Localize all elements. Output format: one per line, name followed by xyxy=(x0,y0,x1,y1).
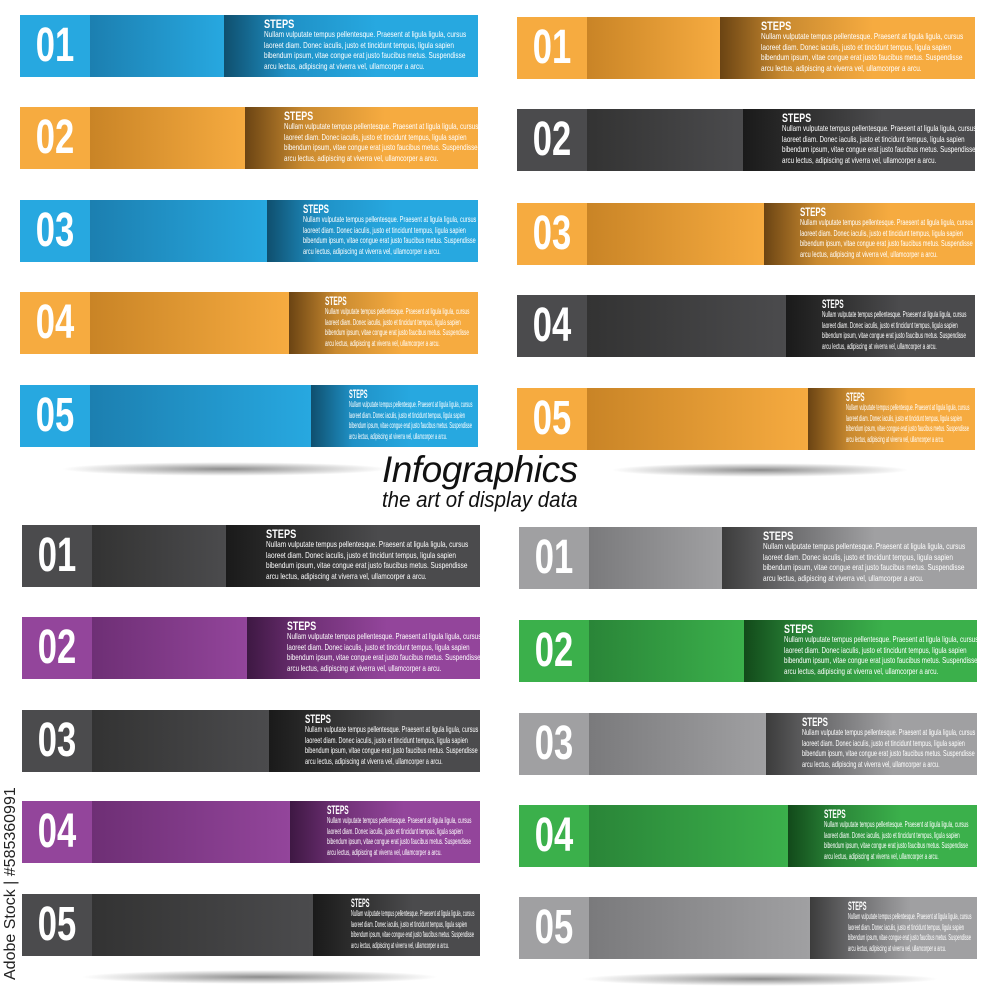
bar 01 orange: STEPS xyxy=(761,19,791,33)
bar 01 blue: Nullam vulputate tempus pellentesque. Praesent at ligula ligula, cursus laoreet diam. Donec iaculis, justo et tincidunt tempus, ligula sapien bibendum ipsum, vitae congue erat justo faucibus metus. Suspendisse arcu lectus, adipiscing at viverra vel, ullamcorper a arcu. xyxy=(264,29,466,70)
bar 04 purple: STEPS xyxy=(327,803,349,817)
bar 04 green: STEPS xyxy=(824,807,846,821)
bar 03 blue: 03 xyxy=(36,204,74,257)
panel: bottom-left group xyxy=(22,525,480,956)
bar 02 purple xyxy=(22,617,480,679)
bar 05 orange xyxy=(517,388,975,450)
vertical stock id text: Adobe Stock | #585360991 xyxy=(2,787,19,980)
bar 05 dark: Nullam vulputate tempus pellentesque. Praesent at ligula ligula, cursus laoreet diam. Donec iaculis, justo et tincidunt tempus, ligula sapien bibendum ipsum, vitae congue erat justo faucibus metus. Suspendisse arcu lectus, adipiscing at viverra vel, ullamcorper a arcu. xyxy=(351,908,474,950)
bar 04 orange: STEPS xyxy=(325,294,347,308)
bar 01 blue: 01 xyxy=(36,19,74,72)
bar 01 blue xyxy=(20,15,478,77)
bar 03 dark: 03 xyxy=(38,714,76,767)
bar 01 dark: 01 xyxy=(38,529,76,582)
bar 01 gray: STEPS xyxy=(763,529,793,543)
bar 04 dark xyxy=(517,295,975,357)
bar 05 blue xyxy=(20,385,478,447)
bar 04 orange: 04 xyxy=(36,296,74,349)
bar 05 dark xyxy=(22,894,480,956)
bar 04 green: Nullam vulputate tempus pellentesque. Praesent at ligula ligula, cursus laoreet diam. Donec iaculis, justo et tincidunt tempus, ligula sapien bibendum ipsum, vitae congue erat justo faucibus metus. Suspendisse arcu lectus, adipiscing at viverra vel, ullamcorper a arcu. xyxy=(824,819,968,860)
panel: bottom-right group xyxy=(519,527,977,959)
bar 02 dark xyxy=(517,109,975,171)
bar 05 dark: STEPS xyxy=(351,896,369,910)
bar 02 orange: Nullam vulputate tempus pellentesque. Praesent at ligula ligula, cursus laoreet diam. Donec iaculis, justo et tincidunt tempus, ligula sapien bibendum ipsum, vitae congue erat justo faucibus metus. Suspendisse arcu lectus, adipiscing at viverra vel, ullamcorper a arcu. xyxy=(284,121,478,162)
bar 01 gray xyxy=(519,527,977,589)
bar 05 orange: STEPS xyxy=(846,390,864,404)
shadow bottom right xyxy=(580,972,940,986)
bar 01 gray: 01 xyxy=(535,531,573,584)
bar 03 blue: STEPS xyxy=(303,202,329,216)
bar 03 blue: Nullam vulputate tempus pellentesque. Praesent at ligula ligula, cursus laoreet diam. Donec iaculis, justo et tincidunt tempus, ligula sapien bibendum ipsum, vitae congue erat justo faucibus metus. Suspendisse arcu lectus, adipiscing at viverra vel, ullamcorper a arcu. xyxy=(303,214,476,256)
bar 02 green: Nullam vulputate tempus pellentesque. Praesent at ligula ligula, cursus laoreet diam. Donec iaculis, justo et tincidunt tempus, ligula sapien bibendum ipsum, vitae congue erat justo faucibus metus. Suspendisse arcu lectus, adipiscing at viverra vel, ullamcorper a arcu. xyxy=(784,634,977,676)
bar 04 green xyxy=(519,805,977,867)
bar 04 green: 04 xyxy=(535,809,573,862)
bar 03 dark xyxy=(22,710,480,772)
bar 02 dark: STEPS xyxy=(782,111,811,125)
bar 03 gray: STEPS xyxy=(802,715,828,729)
bar 03 gray: Nullam vulputate tempus pellentesque. Praesent at ligula ligula, cursus laoreet diam. Donec iaculis, justo et tincidunt tempus, ligula sapien bibendum ipsum, vitae congue erat justo faucibus metus. Suspendisse arcu lectus, adipiscing at viverra vel, ullamcorper a arcu. xyxy=(802,727,975,768)
bar 01 dark xyxy=(22,525,480,587)
bar 01 dark: Nullam vulputate tempus pellentesque. Praesent at ligula ligula, cursus laoreet diam. Donec iaculis, justo et tincidunt tempus, ligula sapien bibendum ipsum, vitae congue erat justo faucibus metus. Suspendisse arcu lectus, adipiscing at viverra vel, ullamcorper a arcu. xyxy=(266,539,468,580)
bar 04 dark: STEPS xyxy=(822,297,844,311)
bar 04 orange: Nullam vulputate tempus pellentesque. Praesent at ligula ligula, cursus laoreet diam. Donec iaculis, justo et tincidunt tempus, ligula sapien bibendum ipsum, vitae congue erat justo faucibus metus. Suspendisse arcu lectus, adipiscing at viverra vel, ullamcorper a arcu. xyxy=(325,306,469,348)
bar 05 orange: Nullam vulputate tempus pellentesque. Praesent at ligula ligula, cursus laoreet diam. Donec iaculis, justo et tincidunt tempus, ligula sapien bibendum ipsum, vitae congue erat justo faucibus metus. Suspendisse arcu lectus, adipiscing at viverra vel, ullamcorper a arcu. xyxy=(846,402,969,444)
bar 04 orange xyxy=(20,292,478,354)
bar 05 gray: Nullam vulputate tempus pellentesque. Praesent at ligula ligula, cursus laoreet diam. Donec iaculis, justo et tincidunt tempus, ligula sapien bibendum ipsum, vitae congue erat justo faucibus metus. Suspendisse arcu lectus, adipiscing at viverra vel, ullamcorper a arcu. xyxy=(848,911,971,952)
bar 03 gray xyxy=(519,713,977,775)
bar 02 dark: Nullam vulputate tempus pellentesque. Praesent at ligula ligula, cursus laoreet diam. Donec iaculis, justo et tincidunt tempus, ligula sapien bibendum ipsum, vitae congue erat justo faucibus metus. Suspendisse arcu lectus, adipiscing at viverra vel, ullamcorper a arcu. xyxy=(782,123,975,164)
bar 01 gray: Nullam vulputate tempus pellentesque. Praesent at ligula ligula, cursus laoreet diam. Donec iaculis, justo et tincidunt tempus, ligula sapien bibendum ipsum, vitae congue erat justo faucibus metus. Suspendisse arcu lectus, adipiscing at viverra vel, ullamcorper a arcu. xyxy=(763,541,965,582)
bar 02 orange: 02 xyxy=(36,111,74,164)
title: the art of display data xyxy=(382,487,578,512)
bar 02 orange xyxy=(20,107,478,169)
bar 02 dark: 02 xyxy=(533,113,571,166)
bar 05 gray: STEPS xyxy=(848,899,866,913)
bar 02 orange: STEPS xyxy=(284,109,313,123)
shadow right xyxy=(610,463,910,477)
bar 01 blue: STEPS xyxy=(264,17,294,31)
bar 02 purple: Nullam vulputate tempus pellentesque. Praesent at ligula ligula, cursus laoreet diam. Donec iaculis, justo et tincidunt tempus, ligula sapien bibendum ipsum, vitae congue erat justo faucibus metus. Suspendisse arcu lectus, adipiscing at viverra vel, ullamcorper a arcu. xyxy=(287,631,480,672)
bar 03 orange: 03 xyxy=(533,207,571,260)
bar 02 purple: 02 xyxy=(38,621,76,674)
bar 02 green: 02 xyxy=(535,624,573,677)
bar 02 green: STEPS xyxy=(784,622,813,636)
bar 05 gray: 05 xyxy=(535,901,573,954)
panel: top-left group xyxy=(20,15,478,447)
bar 05 dark: 05 xyxy=(38,898,76,951)
bar 03 gray: 03 xyxy=(535,717,573,770)
bar 04 purple: Nullam vulputate tempus pellentesque. Praesent at ligula ligula, cursus laoreet diam. Donec iaculis, justo et tincidunt tempus, ligula sapien bibendum ipsum, vitae congue erat justo faucibus metus. Suspendisse arcu lectus, adipiscing at viverra vel, ullamcorper a arcu. xyxy=(327,815,471,856)
bar 01 orange xyxy=(517,17,975,79)
bar 03 orange: Nullam vulputate tempus pellentesque. Praesent at ligula ligula, cursus laoreet diam. Donec iaculis, justo et tincidunt tempus, ligula sapien bibendum ipsum, vitae congue erat justo faucibus metus. Suspendisse arcu lectus, adipiscing at viverra vel, ullamcorper a arcu. xyxy=(800,217,973,258)
bar 03 orange xyxy=(517,203,975,265)
shadow bottom left xyxy=(80,970,440,984)
bar 03 blue xyxy=(20,200,478,262)
bar 03 dark: Nullam vulputate tempus pellentesque. Praesent at ligula ligula, cursus laoreet diam. Donec iaculis, justo et tincidunt tempus, ligula sapien bibendum ipsum, vitae congue erat justo faucibus metus. Suspendisse arcu lectus, adipiscing at viverra vel, ullamcorper a arcu. xyxy=(305,724,478,766)
bar 02 green xyxy=(519,620,977,682)
title: Infographics xyxy=(382,449,578,490)
bar 04 dark: Nullam vulputate tempus pellentesque. Praesent at ligula ligula, cursus laoreet diam. Donec iaculis, justo et tincidunt tempus, ligula sapien bibendum ipsum, vitae congue erat justo faucibus metus. Suspendisse arcu lectus, adipiscing at viverra vel, ullamcorper a arcu. xyxy=(822,309,966,350)
bar 05 orange: 05 xyxy=(533,392,571,445)
panel: top-right group xyxy=(517,17,975,450)
bar 05 blue: Nullam vulputate tempus pellentesque. Praesent at ligula ligula, cursus laoreet diam. Donec iaculis, justo et tincidunt tempus, ligula sapien bibendum ipsum, vitae congue erat justo faucibus metus. Suspendisse arcu lectus, adipiscing at viverra vel, ullamcorper a arcu. xyxy=(349,399,472,440)
bar 01 dark: STEPS xyxy=(266,527,296,541)
bar 05 gray xyxy=(519,897,977,959)
bar 02 purple: STEPS xyxy=(287,619,316,633)
bar 03 dark: STEPS xyxy=(305,712,331,726)
bar 01 orange: Nullam vulputate tempus pellentesque. Praesent at ligula ligula, cursus laoreet diam. Donec iaculis, justo et tincidunt tempus, ligula sapien bibendum ipsum, vitae congue erat justo faucibus metus. Suspendisse arcu lectus, adipiscing at viverra vel, ullamcorper a arcu. xyxy=(761,31,963,72)
bar 04 purple xyxy=(22,801,480,863)
bar 03 orange: STEPS xyxy=(800,205,826,219)
bar 04 purple: 04 xyxy=(38,805,76,858)
bar 04 dark: 04 xyxy=(533,299,571,352)
bar 01 orange: 01 xyxy=(533,21,571,74)
bar 05 blue: STEPS xyxy=(349,387,367,401)
title xyxy=(382,449,578,512)
bar 05 blue: 05 xyxy=(36,389,74,442)
shadow left xyxy=(60,462,390,476)
